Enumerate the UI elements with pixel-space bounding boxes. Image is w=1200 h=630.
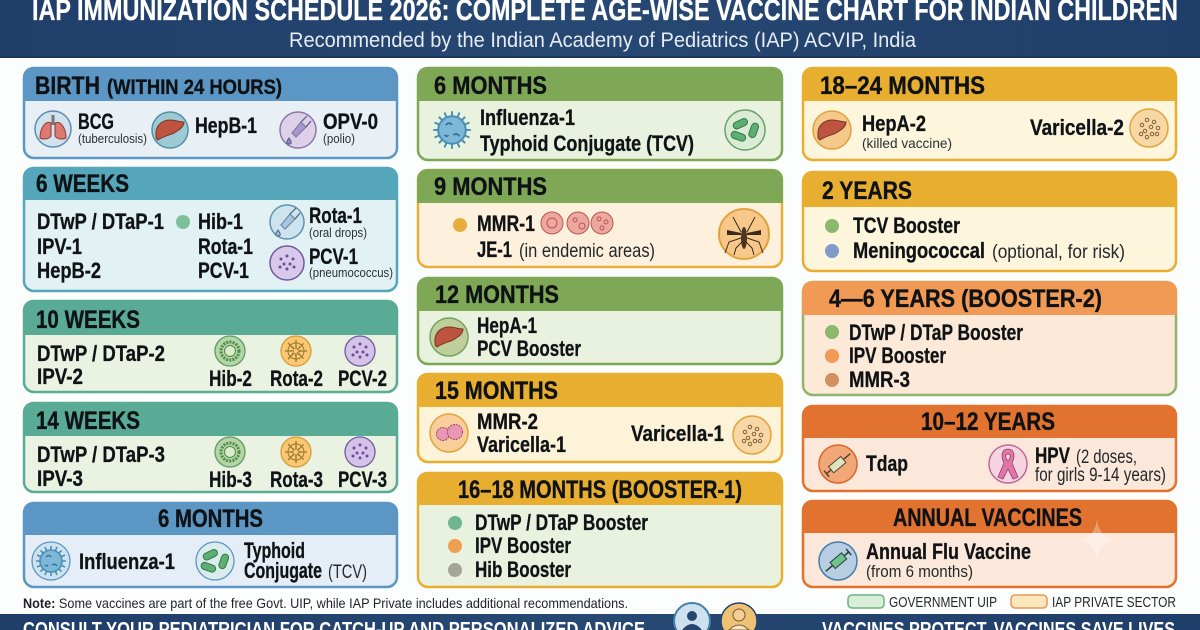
bullet [176, 215, 190, 229]
bullets [448, 516, 462, 577]
vaccine list middle: PCV-1 [198, 258, 249, 283]
vaccine labels: Hib-3 [209, 467, 252, 492]
vaccine list middle: Hib-1 [198, 209, 243, 234]
icon: mosquito [719, 209, 769, 259]
vaccine list: Hib Booster [475, 557, 571, 582]
vaccine list [853, 213, 1125, 263]
vaccine: Varicella-2: Varicella-2 [1030, 115, 1124, 140]
vaccine list left [37, 209, 164, 283]
vaccine list left: IPV-1 [37, 234, 82, 259]
heading: 16–18 MONTHS (BOOSTER-1) [458, 476, 742, 504]
vaccine labels: Rota-2 [270, 366, 323, 391]
vaccine list: MMR-2 [477, 409, 538, 434]
panel: 10-12 years [802, 405, 1177, 491]
icon: liver [152, 112, 188, 148]
vaccine: OPV-0: OPV-0 [323, 109, 378, 134]
icon: pneumococcus [270, 246, 304, 280]
icon: PCV [345, 336, 375, 366]
vaccine: MMR-1: MMR-1 [477, 211, 535, 236]
vaccine: Rota-1 [309, 203, 367, 240]
vaccine list: IPV-3 [37, 466, 83, 491]
vaccine list: Meningococcal [853, 238, 985, 263]
icon: flu syringe [819, 542, 857, 580]
vaccine list: MMR-3 [849, 367, 910, 392]
bullet [453, 218, 467, 232]
legend [848, 594, 1176, 611]
vaccine: HepA-2: HepA-2 [862, 111, 926, 136]
vaccine: typhoid conjugate: Conjugate [244, 558, 322, 583]
heading: BIRTH [35, 72, 100, 100]
heading: 4—6 YEARS (BOOSTER-2) [829, 285, 1102, 313]
panel: 12 months [417, 277, 783, 364]
panel: 4-6 years [802, 281, 1177, 395]
heading: 2 YEARS [822, 177, 912, 205]
vaccine list [477, 313, 581, 361]
vaccine list: Influenza-1 [480, 105, 575, 130]
heading: 12 MONTHS [435, 281, 559, 309]
vaccine: HPV: (2 doses, [1076, 447, 1137, 468]
icon: lungs [35, 111, 71, 147]
panel: 2 years [802, 171, 1177, 271]
vaccine list: IPV Booster [849, 343, 946, 368]
vaccine list middle: Rota-1 [198, 234, 253, 259]
panel: 6 weeks [23, 167, 398, 291]
icon: PCV [345, 437, 375, 467]
sparkle [1079, 519, 1115, 560]
icon: liver [430, 318, 468, 356]
vaccine list: DTwP / DTaP-3 [37, 442, 165, 467]
header banner [0, 0, 1200, 58]
vaccine: BCG: (tuberculosis) [78, 131, 147, 146]
panel: 16-18 months [417, 472, 783, 587]
vaccine list [37, 341, 165, 389]
vaccine: Influenza-1: Influenza-1 [79, 549, 175, 574]
vaccine list [477, 409, 566, 457]
panel: 6 months green [417, 67, 783, 160]
icon: influenza [433, 111, 471, 149]
vaccine list: DTwP / DTaP-2 [37, 341, 165, 366]
vaccine: OPV-0: (polio) [323, 131, 355, 146]
vaccine: PCV-1: PCV-1 [309, 244, 358, 269]
panel: 14 weeks [23, 402, 398, 492]
icon: MMR [430, 414, 468, 452]
vaccine: HepA-2 [862, 111, 952, 151]
legend: IAP private [1011, 594, 1176, 611]
vaccine: HepA-2: (killed vaccine) [862, 135, 952, 151]
heading: 6 MONTHS [434, 72, 547, 100]
vaccine list: IPV Booster [475, 533, 571, 558]
vaccine list: PCV Booster [477, 336, 581, 361]
panel: 10 weeks [23, 300, 398, 392]
panel: 18-24 months [802, 67, 1177, 160]
vaccine labels: PCV-2 [338, 366, 387, 391]
heading: 6 MONTHS [158, 505, 263, 533]
footer banner [0, 603, 1200, 630]
vaccine list left: DTwP / DTaP-1 [37, 209, 164, 234]
vaccine labels [209, 366, 387, 391]
icon: Hib [215, 437, 245, 467]
vaccine: PCV-1: (pneumococcus) [309, 265, 393, 280]
vaccine: OPV-0 [323, 109, 378, 146]
legend: government UIP: GOVERNMENT UIP [889, 594, 997, 611]
heading: 10–12 YEARS [921, 408, 1055, 436]
panel: birth [23, 67, 398, 158]
bullets [825, 325, 839, 387]
icon: typhoid [196, 542, 234, 580]
heading: 10 WEEKS [36, 306, 140, 334]
icon: MMR trio [541, 212, 613, 234]
heading: ANNUAL VACCINES [893, 504, 1082, 532]
vaccine: Tdap: Tdap [866, 451, 908, 476]
vaccine: annual flu: Annual Flu Vaccine [866, 539, 1031, 564]
heading: 15 MONTHS [435, 377, 558, 405]
vaccine: BCG: BCG [78, 109, 114, 134]
vaccine: Varicella-1: Varicella-1 [631, 421, 724, 446]
heading: 18–24 MONTHS [820, 72, 985, 100]
vaccine: HPV: HPV [1035, 443, 1070, 468]
vaccine list [480, 105, 694, 156]
vaccine list left: HepB-2 [37, 258, 101, 283]
vaccine labels [209, 467, 387, 492]
icon: syringe [819, 445, 857, 483]
icon: varicella [733, 416, 771, 454]
vaccine list: DTwP / DTaP Booster [849, 320, 1023, 345]
vaccine labels: Hib-2 [209, 366, 252, 391]
subtitle: Recommended by the Indian Academy of Pediatrics (IAP) ACVIP, India [289, 29, 916, 52]
heading: 14 WEEKS [36, 407, 140, 435]
icon: influenza [32, 542, 70, 580]
icon: ribbon [989, 445, 1027, 483]
icon: varicella [1130, 109, 1168, 147]
bullets [825, 219, 839, 258]
icon: liver [813, 111, 851, 149]
icon: doctor [721, 603, 757, 630]
vaccine: HPV [1035, 443, 1166, 486]
vaccine: typhoid conjugate: Typhoid [244, 538, 305, 563]
panel: annual vaccines [802, 500, 1177, 587]
vaccine list [849, 320, 1023, 392]
vaccine: HepB-1: HepB-1 [195, 113, 257, 138]
icon: typhoid [725, 110, 765, 150]
icon: Rota [281, 336, 311, 366]
vaccine list: HepA-1 [477, 313, 537, 338]
icon: rota drops [270, 205, 304, 239]
heading: 9 MONTHS [434, 173, 547, 201]
vaccine: Rota-1: Rota-1 [309, 203, 362, 228]
vaccine labels: Rota-3 [270, 467, 323, 492]
vaccine list: Varicella-1 [477, 432, 566, 457]
vaccine list: IPV-2 [37, 364, 83, 389]
icon: parent and child [674, 603, 710, 630]
vaccine list [475, 510, 648, 582]
vaccine: JE-1 [477, 237, 655, 262]
vaccine: typhoid conjugate: (TCV) [328, 562, 367, 583]
vaccine list: Typhoid Conjugate (TCV) [480, 131, 694, 156]
panel: 9 months [417, 169, 783, 267]
vaccine list: DTwP / DTaP Booster [475, 510, 648, 535]
heading [35, 72, 282, 100]
vaccine list: TCV Booster [853, 213, 960, 238]
vaccine list: (optional, for risk) [992, 242, 1125, 263]
vaccine: JE-1: (in endemic areas) [519, 241, 655, 262]
vaccine labels: PCV-3 [338, 467, 387, 492]
note: Note: Some vaccines are part of the free Govt. UIP, while IAP Private includes additional recommendations. [23, 595, 628, 611]
legend: government UIP [848, 594, 997, 611]
vaccine list middle [198, 209, 253, 283]
panel: 15 months [417, 373, 783, 462]
icon: Hib [215, 336, 245, 366]
heading: (WITHIN 24 HOURS) [107, 76, 282, 99]
icon: oral drops [280, 112, 316, 148]
vaccine: annual flu [866, 539, 1031, 581]
vaccine list [37, 442, 165, 491]
vaccine: JE-1: JE-1 [477, 237, 512, 262]
vaccine: Rota-1: (oral drops) [309, 225, 367, 240]
icon: Rota [281, 437, 311, 467]
vaccine: HPV: for girls 9-14 years) [1035, 465, 1166, 486]
vaccine: PCV-1 [309, 244, 393, 280]
vaccine: BCG [78, 109, 147, 146]
vaccine: annual flu: (from 6 months) [866, 562, 973, 581]
heading: 6 WEEKS [36, 170, 129, 198]
panel: 6 months blue [23, 502, 398, 587]
vaccine: typhoid conjugate [244, 538, 367, 583]
